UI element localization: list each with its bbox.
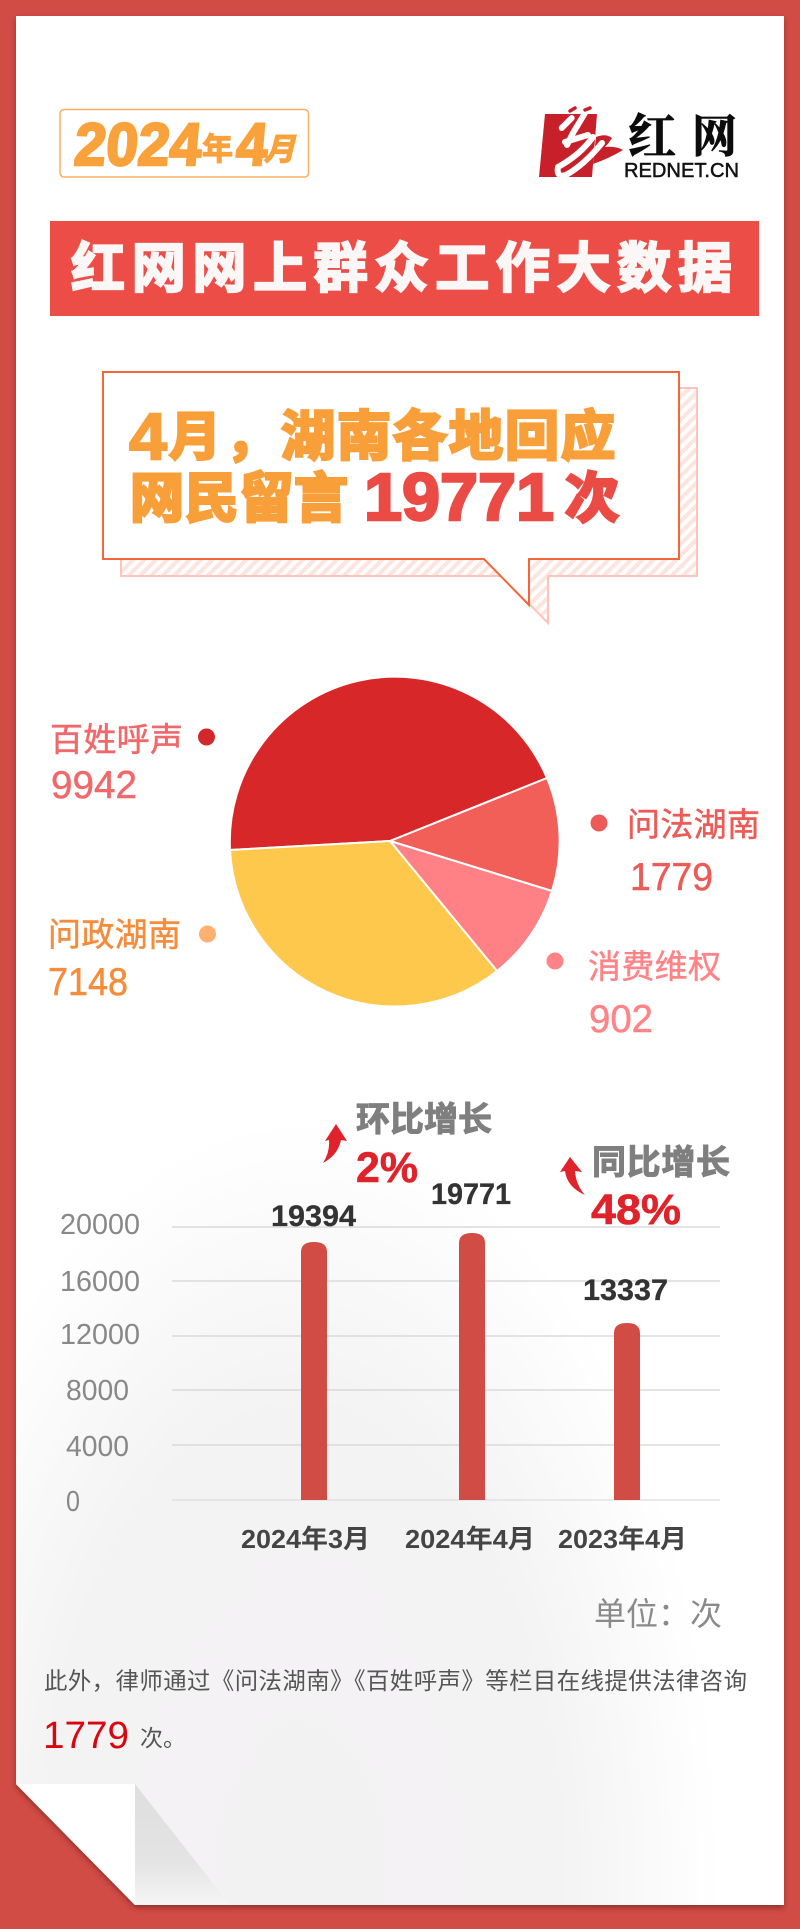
logo: rednet: 红 xyxy=(628,98,676,167)
bubble headline line 1: 月 xyxy=(169,395,221,470)
date badge xyxy=(60,110,308,178)
slice: 问法湖南 xyxy=(390,778,560,891)
bar value labels: 19771 xyxy=(431,1178,511,1211)
y axis labels: 8000 xyxy=(66,1375,129,1407)
bubble headline line 2: 次 xyxy=(565,454,619,533)
logo: rednet: 网 xyxy=(692,100,737,165)
y axis labels: 20000 xyxy=(60,1209,140,1241)
icon: up arrow xyxy=(560,1157,585,1195)
title banner: 红网网上群众工作大数据 xyxy=(71,224,732,303)
y axis labels xyxy=(60,1209,140,1518)
pie label: 问政湖南 xyxy=(48,908,216,1004)
date badge: 年 xyxy=(202,124,233,169)
pie label: 百姓呼声: 百姓呼声 xyxy=(50,713,183,761)
icon: up arrow xyxy=(323,1124,347,1163)
footnote text: 次。 xyxy=(140,1719,186,1753)
slice: 问政湖南 xyxy=(230,841,497,1006)
bar value labels: 19394 xyxy=(271,1200,356,1233)
bars xyxy=(301,1233,640,1500)
logo: rednet xyxy=(539,98,739,182)
bubble headline line 1: ， xyxy=(226,395,278,470)
category labels: 2024年3月 xyxy=(241,1524,370,1554)
pie label: 问政湖南: 问政湖南 xyxy=(48,908,181,956)
category labels: 2023年4月 xyxy=(558,1524,687,1554)
bubble headline line 2: 网民留言 xyxy=(130,454,348,533)
logo: rednet: REDNET.CN xyxy=(624,160,739,182)
slice: 消费维权 xyxy=(390,841,552,971)
pie label: 问法湖南 xyxy=(590,798,760,899)
callout: year on year growth xyxy=(560,1135,730,1234)
pie label: 问政湖南: 7148 xyxy=(48,961,128,1004)
category labels: 2024年4月 xyxy=(405,1524,535,1554)
callout: month on month growth xyxy=(323,1092,492,1192)
bubble headline line 1 xyxy=(129,392,615,473)
bubble hatched shadow xyxy=(121,388,697,623)
y axis gridlines xyxy=(172,1227,720,1500)
callout: month on month growth: 2% xyxy=(356,1144,418,1192)
y axis labels: 16000 xyxy=(60,1266,140,1298)
bubble headline line 2: 19771 xyxy=(364,460,554,535)
footnote text: 此外，律师通过《问法湖南》《百姓呼声》等栏目在线提供法律咨询 xyxy=(44,1662,747,1696)
bar value labels xyxy=(271,1178,668,1307)
category labels xyxy=(241,1524,687,1554)
pie label: 消费维权 xyxy=(546,940,721,1041)
unit label: 单位：次 xyxy=(594,1589,722,1635)
slice: 百姓呼声 xyxy=(230,677,547,850)
footnote text: 1779 xyxy=(43,1715,129,1757)
pie label: 消费维权: 消费维权 xyxy=(588,940,721,988)
y axis labels: 0 xyxy=(66,1486,80,1518)
date badge: 月 xyxy=(264,124,297,169)
callout: year on year growth: 48% xyxy=(591,1186,681,1234)
pie label: 百姓呼声: 9942 xyxy=(51,764,137,807)
y axis labels: 4000 xyxy=(66,1431,129,1463)
bubble headline line 1: 湖南各地回应 xyxy=(281,392,615,471)
y axis labels: 12000 xyxy=(60,1319,140,1351)
pie chart xyxy=(230,677,560,1006)
pie label: 消费维权: 902 xyxy=(589,998,653,1041)
bar chart xyxy=(60,1178,720,1554)
callout: year on year growth: 同比增长 xyxy=(592,1135,730,1184)
pie label: 问法湖南: 1779 xyxy=(630,856,713,899)
bar value labels: 13337 xyxy=(583,1274,668,1307)
pie label: 问法湖南: 问法湖南 xyxy=(627,798,760,846)
pie label: 百姓呼声 xyxy=(50,713,215,807)
bubble headline line 2 xyxy=(130,454,619,535)
speech bubble callout xyxy=(103,372,697,623)
bubble outline xyxy=(103,372,679,605)
footnote text xyxy=(43,1662,747,1757)
bubble headline line 1: 4 xyxy=(129,399,167,473)
date badge: 2024 xyxy=(72,111,205,178)
callout: month on month growth: 环比增长 xyxy=(356,1092,492,1141)
date badge: 4 xyxy=(234,111,271,178)
